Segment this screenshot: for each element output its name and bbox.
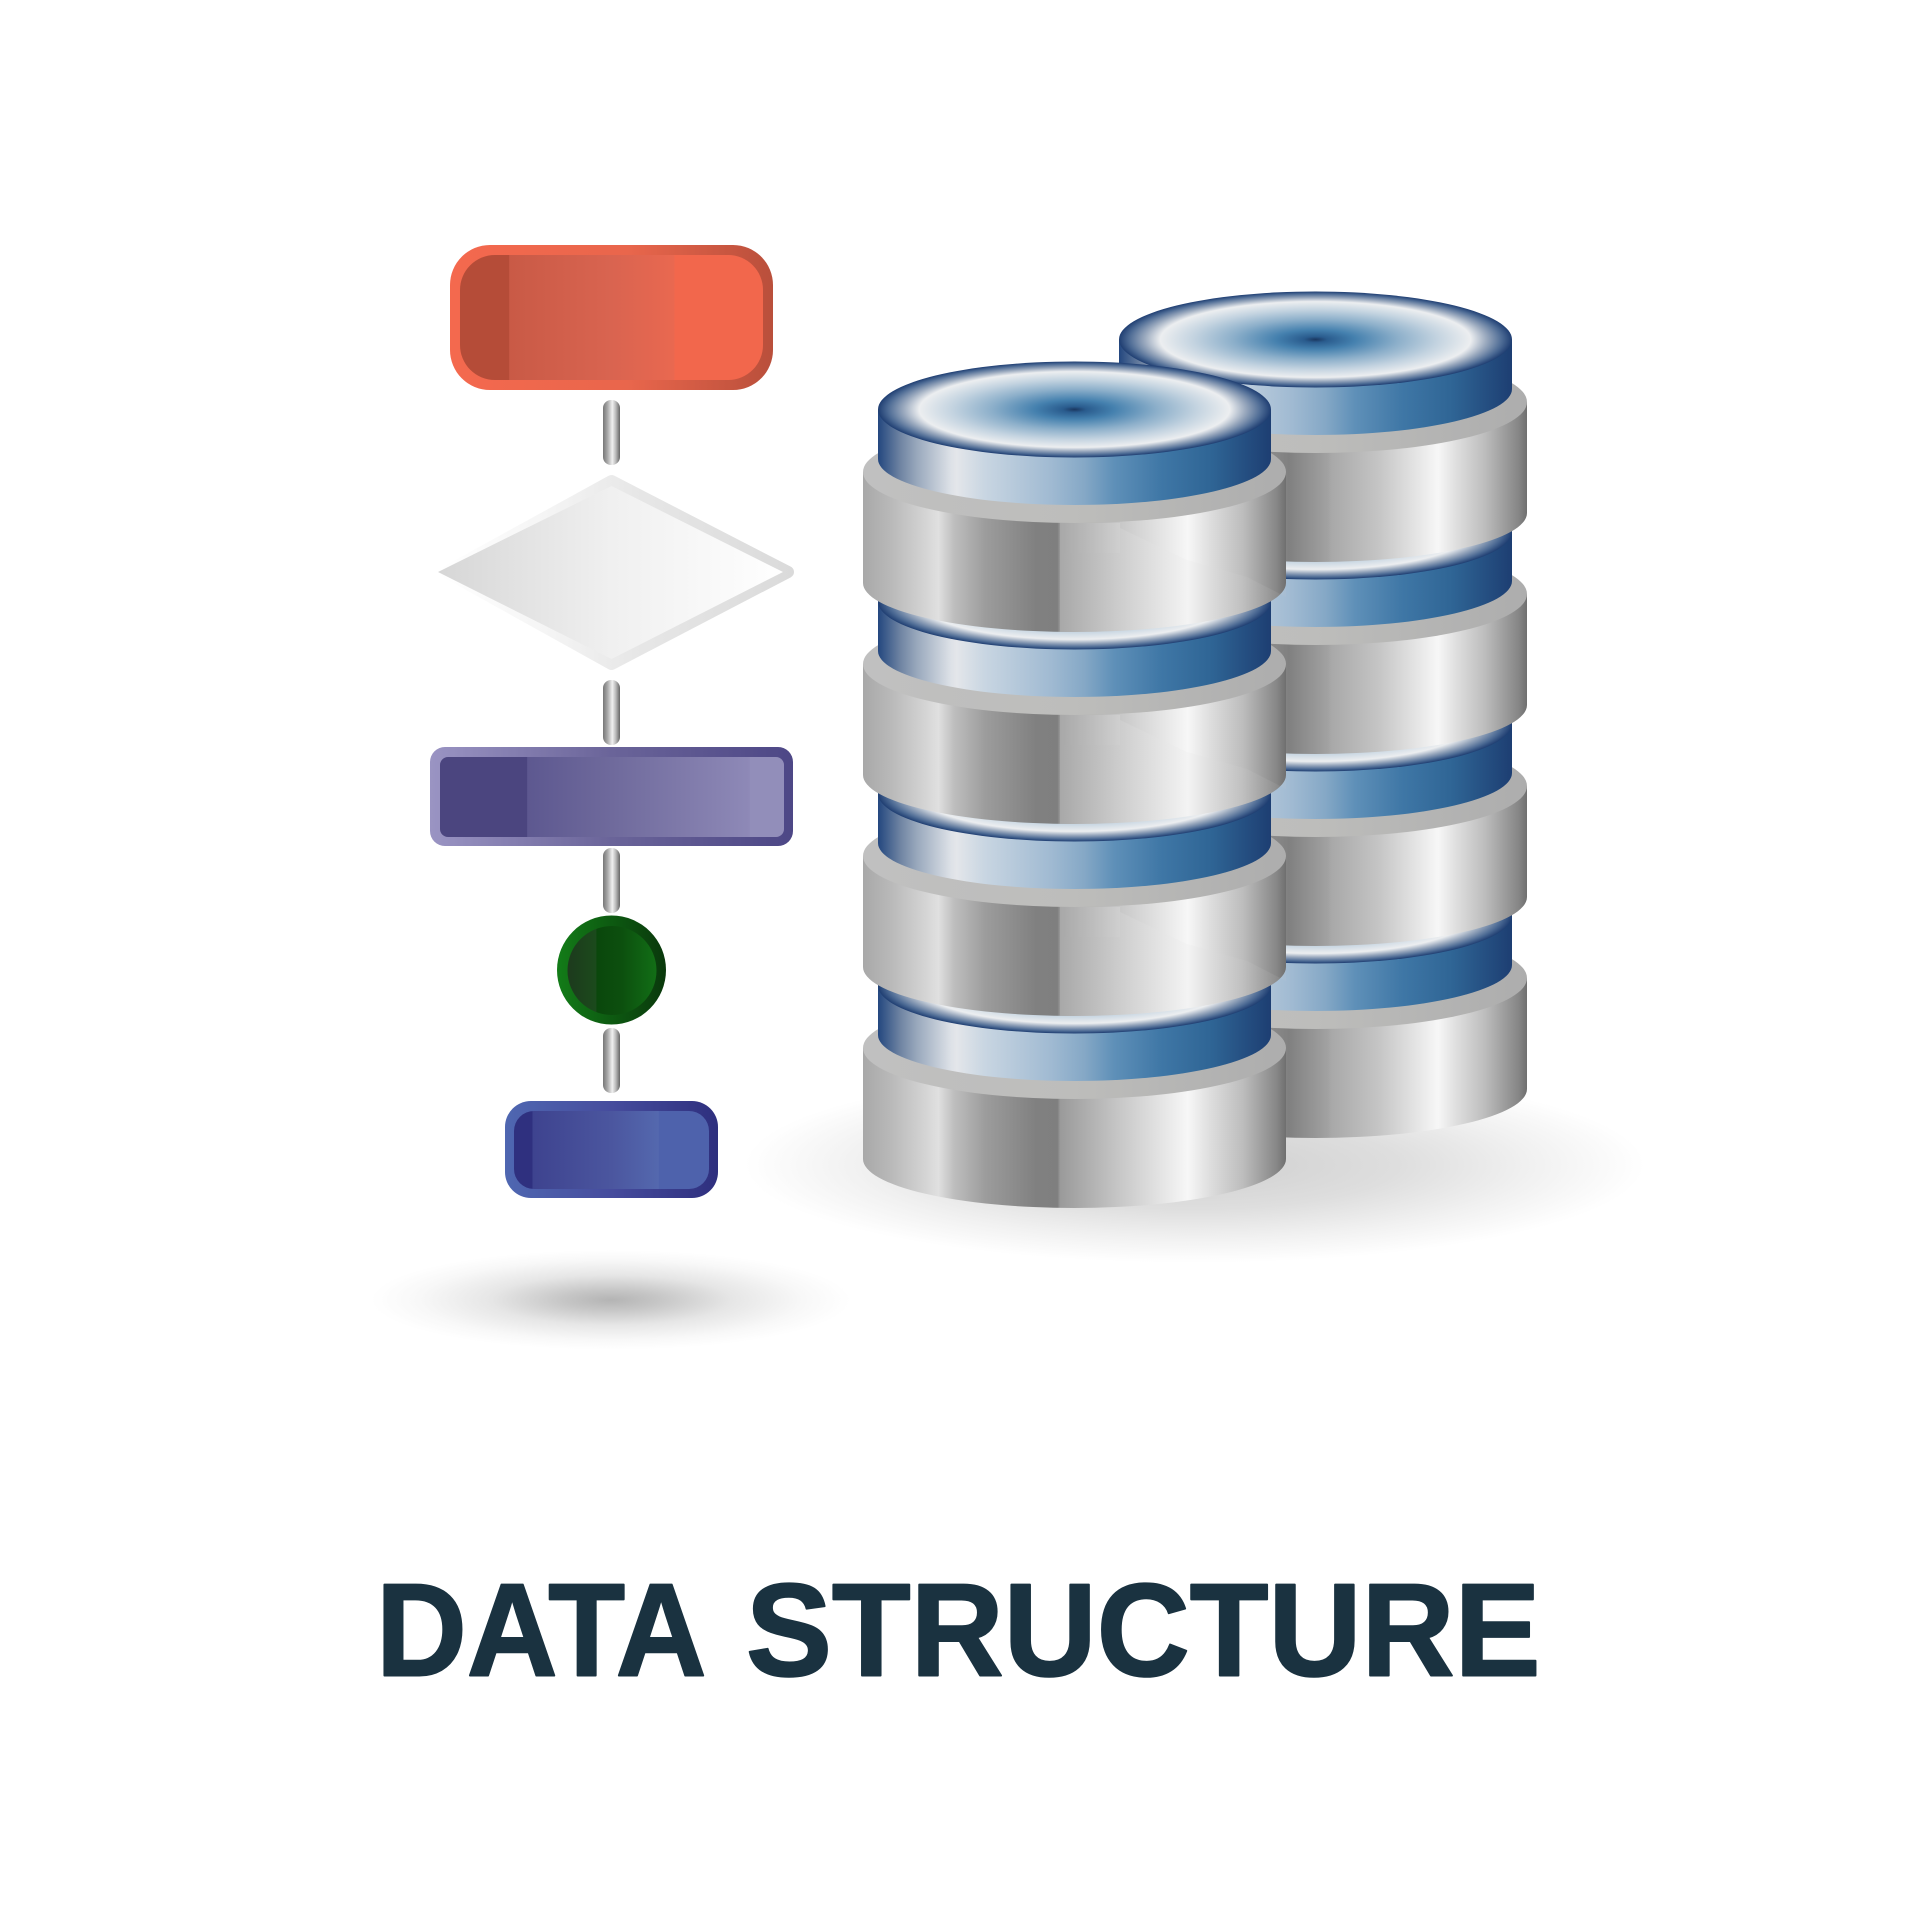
title [376, 1556, 1540, 1704]
back tier 4 [1104, 868, 1527, 1138]
front database stack [863, 362, 1286, 1208]
front tier 1 [863, 362, 1286, 632]
purple process rectangle [430, 747, 793, 846]
green circle node [557, 916, 666, 1024]
red rounded terminator [450, 245, 773, 390]
blue rounded end box [505, 1101, 718, 1198]
title: DATA [376, 1556, 706, 1704]
connector: process to node [603, 848, 620, 913]
title: STRUCTURE [746, 1556, 1540, 1704]
front tier 3 [863, 746, 1286, 1016]
white decision diamond [438, 481, 788, 664]
back tier 3 [1104, 676, 1527, 946]
flowchart diagram [430, 245, 793, 1198]
front tier 4 [863, 938, 1286, 1208]
back tier 1 [1104, 292, 1527, 562]
back tier 2 [1104, 484, 1527, 754]
connector: node to end [603, 1028, 620, 1093]
back database stack [1104, 292, 1527, 1138]
front tier 2 [863, 554, 1286, 824]
ground shadow: flowchart [371, 1250, 851, 1350]
ground shadow: database stacks [745, 1067, 1645, 1263]
connector: decision to process [603, 680, 620, 745]
connector: terminator to decision [603, 400, 620, 465]
